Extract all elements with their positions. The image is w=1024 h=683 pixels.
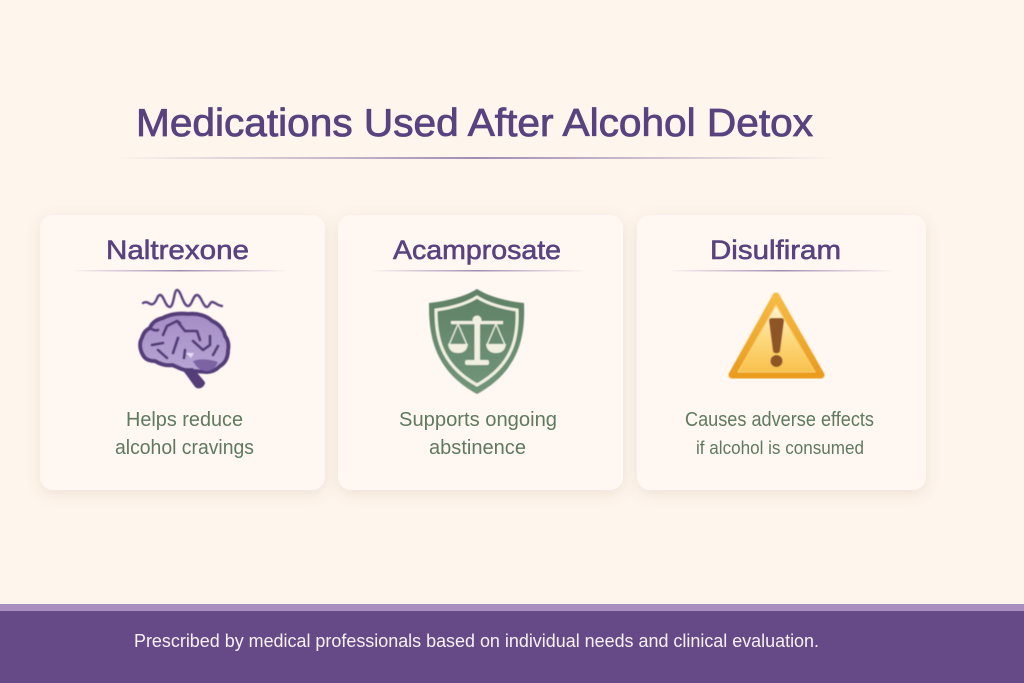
text: Acamprosate description: Supports ongoing	[399, 409, 557, 431]
icon: brain with craving wave	[140, 290, 228, 386]
heading: Acamprosate: Acamprosate	[393, 235, 561, 265]
text: Disulfiram description: if alcohol is consumed	[696, 437, 864, 458]
text: Disulfiram description	[685, 409, 874, 458]
panel: Disulfiram	[637, 215, 926, 490]
heading: Disulfiram: Disulfiram	[710, 235, 841, 265]
panel: Naltrexone	[40, 215, 325, 490]
text: Naltrexone description: Helps reduce	[126, 409, 243, 431]
text: Naltrexone description: alcohol cravings	[115, 437, 254, 459]
heading: Naltrexone: Naltrexone	[106, 235, 249, 265]
text: Disulfiram description: Causes adverse effects	[685, 409, 874, 431]
text: Acamprosate description: abstinence	[429, 437, 526, 459]
title: Medications Used After Alcohol Detox	[136, 102, 814, 145]
text: Acamprosate description	[399, 409, 557, 459]
icon: warning triangle	[732, 296, 821, 375]
footer band	[0, 604, 1024, 683]
icon: shield with scales	[429, 289, 524, 394]
panel: Acamprosate	[338, 215, 623, 490]
footer text: Prescribed by medical professionals based on individual needs and clinical evaluation.	[134, 630, 819, 651]
text: Naltrexone description	[115, 409, 254, 459]
